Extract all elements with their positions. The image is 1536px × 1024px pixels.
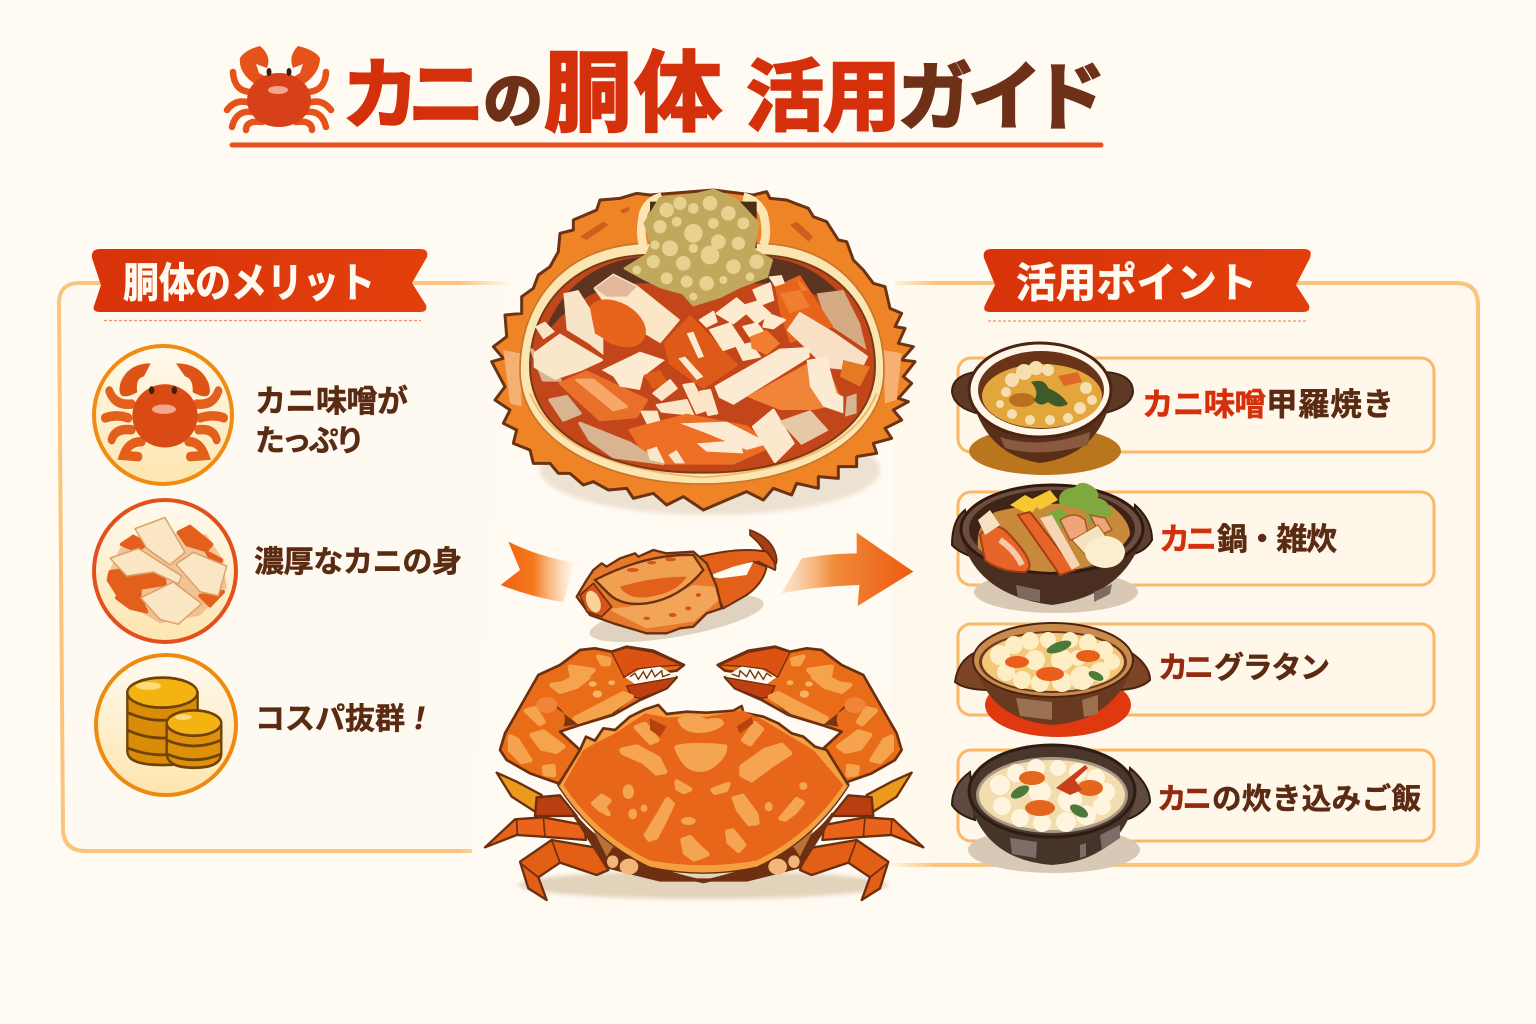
- text: use 1: [1142, 386, 1394, 422]
- crab miso: [625, 190, 772, 305]
- text: merit 1: [255, 384, 408, 458]
- arrow: left: [501, 542, 575, 602]
- banner: merits: 胴体のメリット: [123, 260, 375, 306]
- panel: merits: [59, 249, 510, 851]
- text: merit 1: たっぷり: [255, 425, 365, 458]
- text: use 3: [1158, 652, 1330, 685]
- text: merit 1: カニ味噌が: [255, 384, 408, 419]
- title: 胴体: [544, 44, 722, 143]
- title: 活用: [746, 53, 901, 141]
- icon: crab: [94, 346, 232, 484]
- use 1: pot: [952, 343, 1133, 475]
- title underline: [232, 142, 1101, 148]
- title icon: crab: [227, 46, 331, 130]
- legs: [485, 773, 923, 900]
- title: カニ: [342, 53, 485, 139]
- banner: merits: [92, 249, 427, 320]
- use 3: pot: [955, 623, 1150, 737]
- merit 1: [94, 346, 408, 484]
- text: use 3: カニ: [1158, 652, 1214, 685]
- use 3: box: [958, 624, 1434, 715]
- text: merit 3: ！: [402, 703, 438, 736]
- use 2: box: [958, 492, 1434, 585]
- text: use 4: カニ: [1157, 783, 1212, 816]
- illustration: crab claw: [577, 530, 777, 652]
- merit 3: [96, 655, 438, 795]
- icon: coins: [96, 655, 236, 795]
- use 4: pot: [952, 745, 1150, 873]
- text: merit 2: 濃厚なカニの身: [254, 546, 462, 579]
- crab meat: [535, 275, 870, 463]
- rim: [520, 243, 884, 484]
- illustration: crab shell filled with meat: [492, 190, 915, 515]
- text: use 2: 鍋・雑炊: [1217, 522, 1337, 557]
- use 1: box: [958, 358, 1434, 452]
- title: [342, 44, 1106, 143]
- text: use 3: グラタン: [1214, 652, 1330, 685]
- use 2: pot: [952, 483, 1152, 613]
- underside: [573, 813, 833, 882]
- text: use 1: カニ味噌: [1142, 386, 1266, 422]
- panel: uses: [890, 249, 1478, 873]
- text: merit 3: コスパ抜群: [255, 703, 405, 736]
- icon: crab meat: [94, 500, 236, 642]
- text: use 1: 甲羅焼き: [1266, 386, 1394, 422]
- carapace: [558, 705, 848, 872]
- merit 2: [94, 500, 462, 642]
- claws: [500, 647, 902, 783]
- text: use 4: の炊き込みご飯: [1212, 782, 1421, 816]
- arrow: right: [782, 533, 913, 606]
- text: use 2: [1159, 522, 1337, 557]
- cavity: [530, 255, 875, 473]
- text: use 2: カニ: [1159, 522, 1217, 557]
- banner: uses: [984, 249, 1311, 321]
- food base: [817, 290, 867, 350]
- banner: uses: 活用ポイント: [1016, 260, 1257, 306]
- title: の: [483, 68, 543, 135]
- illustration: whole crab: [485, 647, 923, 900]
- title: ガイド: [898, 56, 1106, 139]
- use 4: box: [958, 750, 1434, 841]
